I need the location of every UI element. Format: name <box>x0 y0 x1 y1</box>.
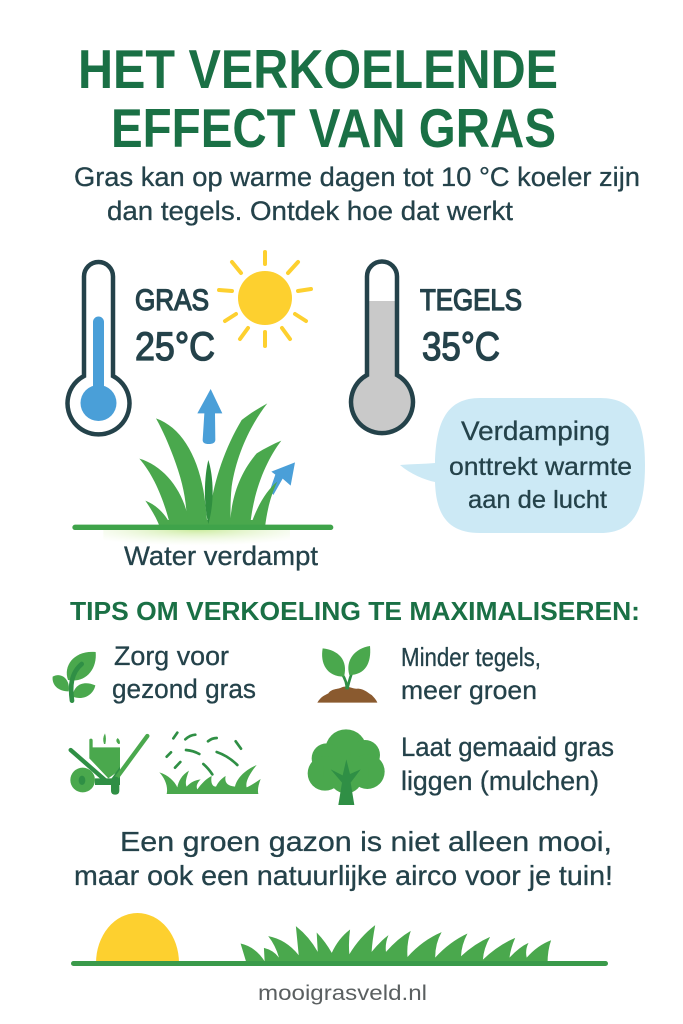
title: EFFECT VAN GRAS <box>111 97 556 159</box>
tip: fewer tiles: meer groen <box>401 675 537 705</box>
icon: wheelbarrow <box>70 733 147 795</box>
tip: healthy grass: Zorg voor <box>114 641 229 671</box>
grass blades <box>139 403 281 527</box>
tip: fewer tiles: Minder tegels, <box>401 642 541 672</box>
callout: evaporation: Verdamping <box>461 416 610 446</box>
label: gras temperature: 25°C <box>135 325 215 369</box>
icon: grass thermometer <box>67 262 130 434</box>
footer: website: mooigrasveld.nl <box>258 982 427 1005</box>
callout: evaporation: onttrekt warmte <box>449 453 632 481</box>
illustration: grass with evaporation arrows <box>72 389 333 553</box>
arrow: vapour up <box>197 389 222 444</box>
tip: mulching: liggen (mulchen) <box>401 766 599 796</box>
tip: mulching <box>401 732 614 796</box>
icon: leaf sprig <box>53 652 96 701</box>
label: gras temperature <box>135 284 215 369</box>
subtitle: Gras kan op warme dagen tot 10 °C koeler zijn <box>74 162 640 192</box>
icon: tiles thermometer <box>351 262 413 433</box>
icon: tree <box>308 729 385 805</box>
tip: fewer tiles <box>401 642 541 705</box>
tip: healthy grass <box>112 641 256 704</box>
caption: water verdampt: Water verdampt <box>124 541 319 571</box>
icon: seedling <box>317 646 377 703</box>
label: tegels temperature: TEGELS <box>420 284 522 317</box>
heading: tips: TIPS OM VERKOELING TE MAXIMALISEREN: <box>70 596 640 626</box>
label: gras temperature: GRAS <box>135 284 209 317</box>
callout: evaporation: aan de lucht <box>468 486 607 514</box>
subtitle: dan tegels. Ontdek hoe dat werkt <box>107 196 514 226</box>
label: tegels temperature <box>420 284 522 369</box>
illustration: sun and grass horizon <box>71 913 608 966</box>
closing message <box>74 826 613 891</box>
arrow: vapour right <box>270 462 295 495</box>
tip: mulching: Laat gemaaid gras <box>401 732 614 762</box>
subtitle <box>74 162 640 226</box>
icon: sun <box>219 252 311 346</box>
callout: evaporation <box>400 398 645 533</box>
label: tegels temperature: 35°C <box>422 325 500 369</box>
title: HET VERKOELENDE <box>78 38 558 100</box>
closing message: maar ook een natuurlijke airco voor je tuin! <box>74 860 613 891</box>
tip: healthy grass: gezond gras <box>112 674 256 704</box>
title <box>78 38 558 159</box>
closing message: Een groen gazon is niet alleen mooi, <box>120 826 612 857</box>
icon: mown grass clippings <box>159 733 261 794</box>
